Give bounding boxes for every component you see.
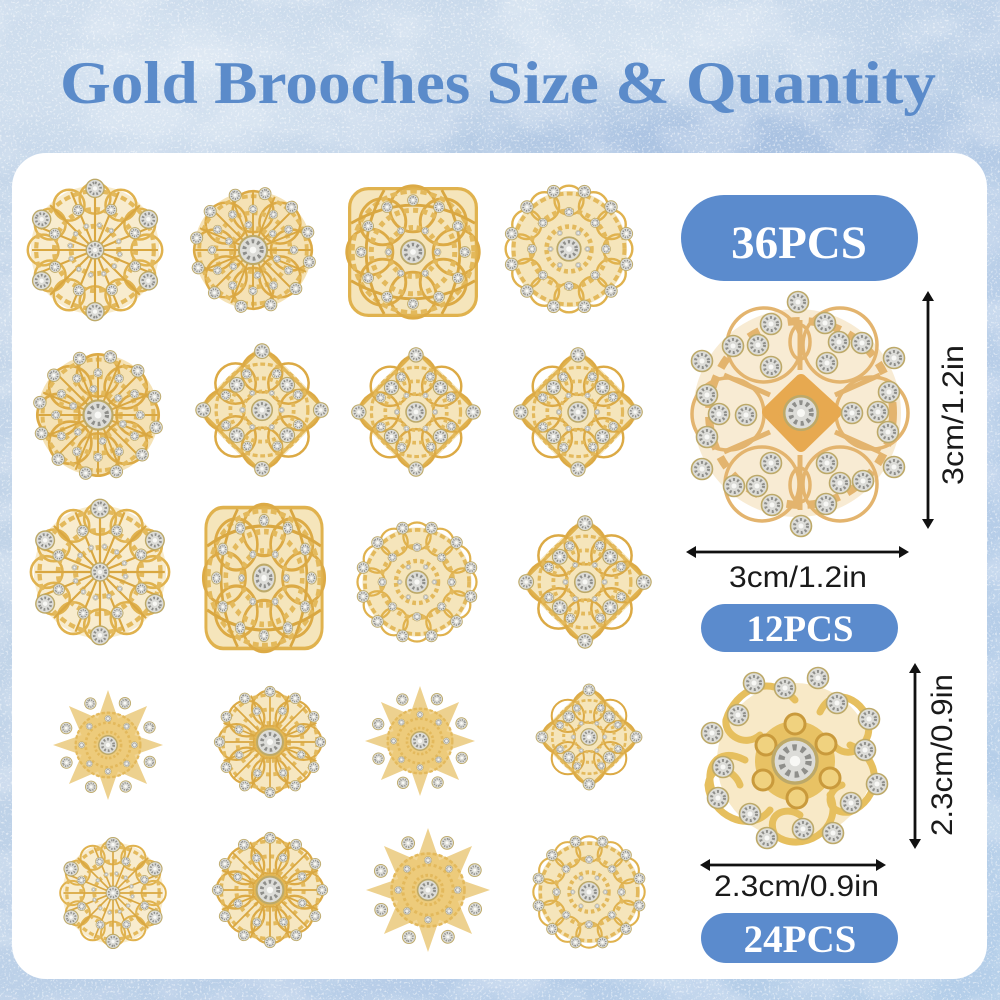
brooch row 3 col 2 (203, 504, 325, 652)
brooch row 3 col 3 (341, 506, 493, 658)
brooch row 4 col 4 (535, 683, 643, 791)
badge: 24PCS (701, 913, 898, 963)
brooch row 3 col 1 (3, 477, 197, 667)
brooch row 1 col 4 (489, 169, 649, 329)
brooch row 5 col 2 (212, 832, 328, 948)
dimension label: 3cm/1.2in height: 3cm/1.2in (937, 345, 970, 485)
brooch row 5 col 3 (353, 815, 503, 965)
brooch row 1 col 2 (178, 175, 328, 325)
brooch row 4 col 1 (42, 679, 174, 811)
badge: 12PCS: 12PCS (747, 609, 853, 650)
badge: 36PCS (681, 195, 918, 281)
dimension label: 2.3cm/0.9in width: 2.3cm/0.9in (714, 870, 879, 903)
brooch grid (1, 158, 660, 965)
dimension label: 3cm/1.2in width: 3cm/1.2in (729, 561, 867, 594)
large brooch: 3cm rose gold (692, 292, 908, 536)
brooch row 2 col 2 (195, 343, 329, 477)
brooch row 2 col 3 (351, 347, 481, 477)
arrow: width 3cm (686, 546, 909, 558)
arrow: height 2.3cm (909, 663, 921, 849)
dimension label: 2.3cm/0.9in height: 2.3cm/0.9in (926, 674, 959, 836)
brooch row 5 col 4 (518, 821, 660, 963)
brooch row 1 col 1 (1, 158, 189, 342)
brooch row 4 col 2 (214, 686, 326, 798)
title: Gold Brooches Size & Quantity (60, 50, 936, 116)
badge: 24PCS: 24PCS (744, 918, 856, 961)
large brooch: 2.3cm gold swirl (702, 668, 888, 848)
brooch row 3 col 4 (518, 515, 652, 649)
brooch row 2 col 4 (513, 347, 643, 477)
arrow: width 2.3cm (700, 859, 886, 871)
brooch row 2 col 1 (20, 337, 176, 493)
badge: 12PCS (701, 604, 898, 652)
arrow: height 3cm (922, 291, 934, 529)
badge: 36PCS: 36PCS (731, 217, 867, 269)
brooch row 5 col 1 (39, 821, 187, 965)
brooch row 1 col 3 (347, 186, 479, 318)
brooch row 4 col 3 (354, 675, 486, 807)
